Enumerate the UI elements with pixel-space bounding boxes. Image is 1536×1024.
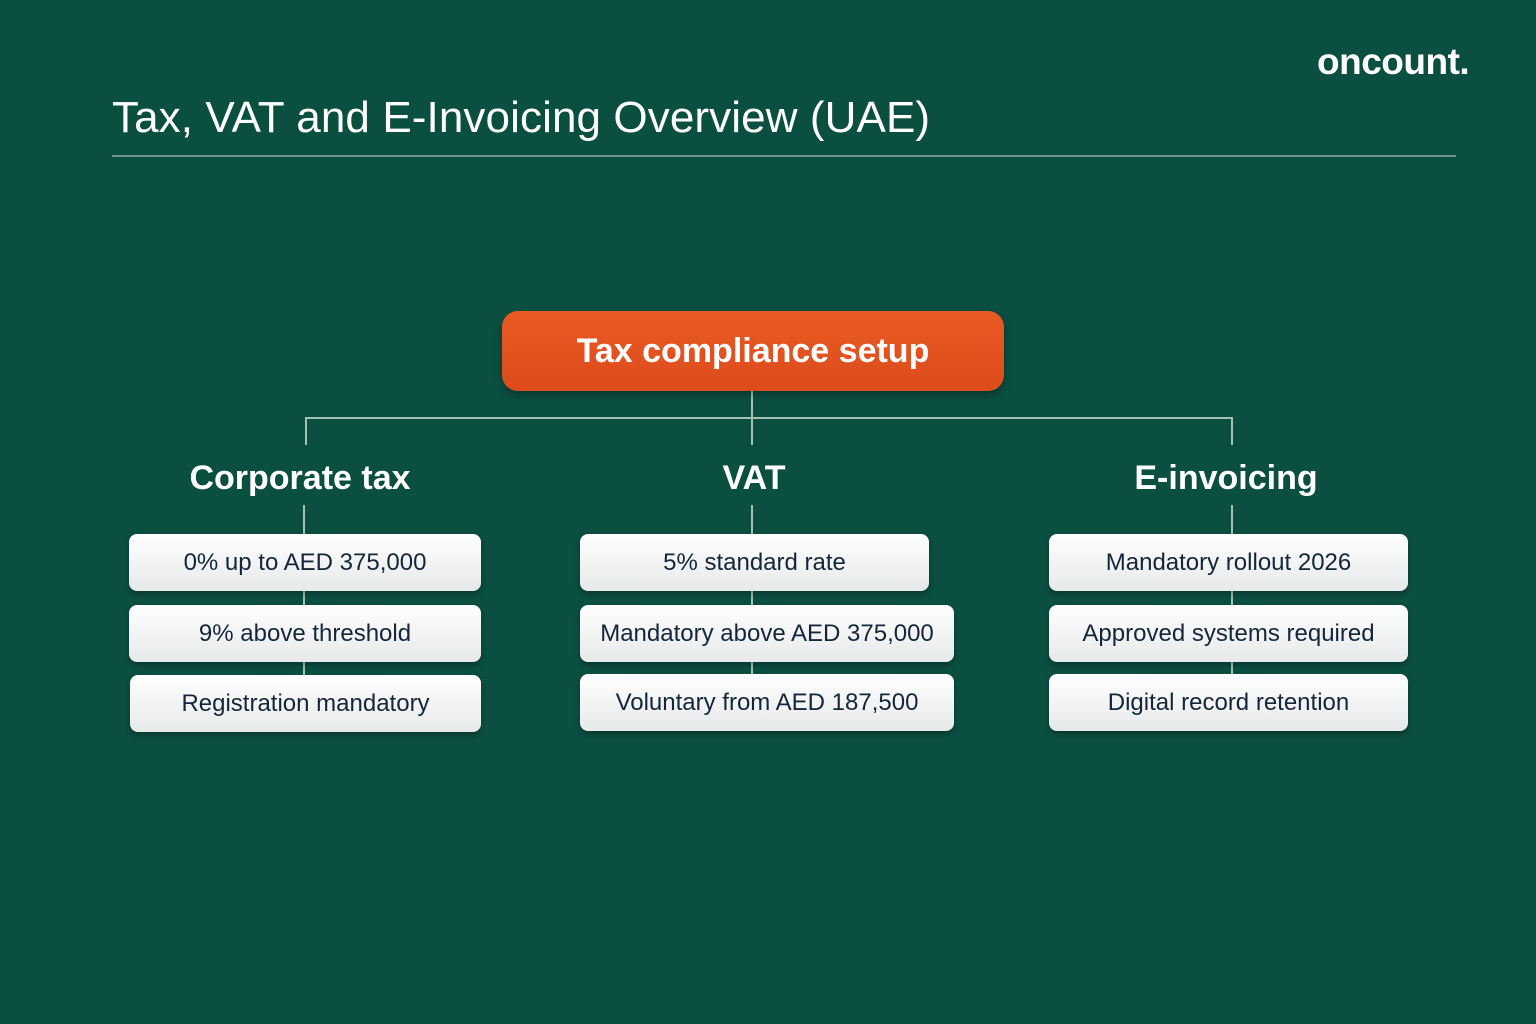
- item: Approved systems required: [1082, 620, 1375, 646]
- item: [580, 605, 954, 662]
- title: Tax, VAT and E-Invoicing Overview (UAE): [112, 93, 930, 142]
- item: [580, 674, 954, 731]
- item: [129, 605, 481, 662]
- item: [580, 534, 929, 591]
- item: Registration mandatory: [181, 690, 430, 716]
- item: [129, 534, 481, 591]
- item: [1049, 674, 1408, 731]
- column: corporate tax: [128, 459, 482, 736]
- root node: Tax compliance setup: [577, 332, 929, 370]
- column: VAT: [579, 459, 955, 735]
- item: 0% up to AED 375,000: [184, 548, 426, 576]
- logo: oncount.: [1317, 41, 1469, 82]
- item: [130, 675, 481, 732]
- item: 5% standard rate: [663, 548, 846, 576]
- heading: Corporate tax: [189, 459, 411, 497]
- item: 9% above threshold: [199, 620, 411, 646]
- column: e-invoicing: [1048, 459, 1409, 735]
- item: Voluntary from AED 187,500: [616, 688, 918, 716]
- item: Mandatory above AED 375,000: [600, 620, 934, 646]
- item: [1049, 605, 1408, 662]
- item: Mandatory rollout 2026: [1106, 548, 1351, 576]
- heading: E-invoicing: [1134, 459, 1318, 497]
- item: Digital record retention: [1108, 688, 1349, 716]
- root node: [502, 311, 1004, 391]
- heading: VAT: [723, 459, 785, 497]
- item: [1049, 534, 1408, 591]
